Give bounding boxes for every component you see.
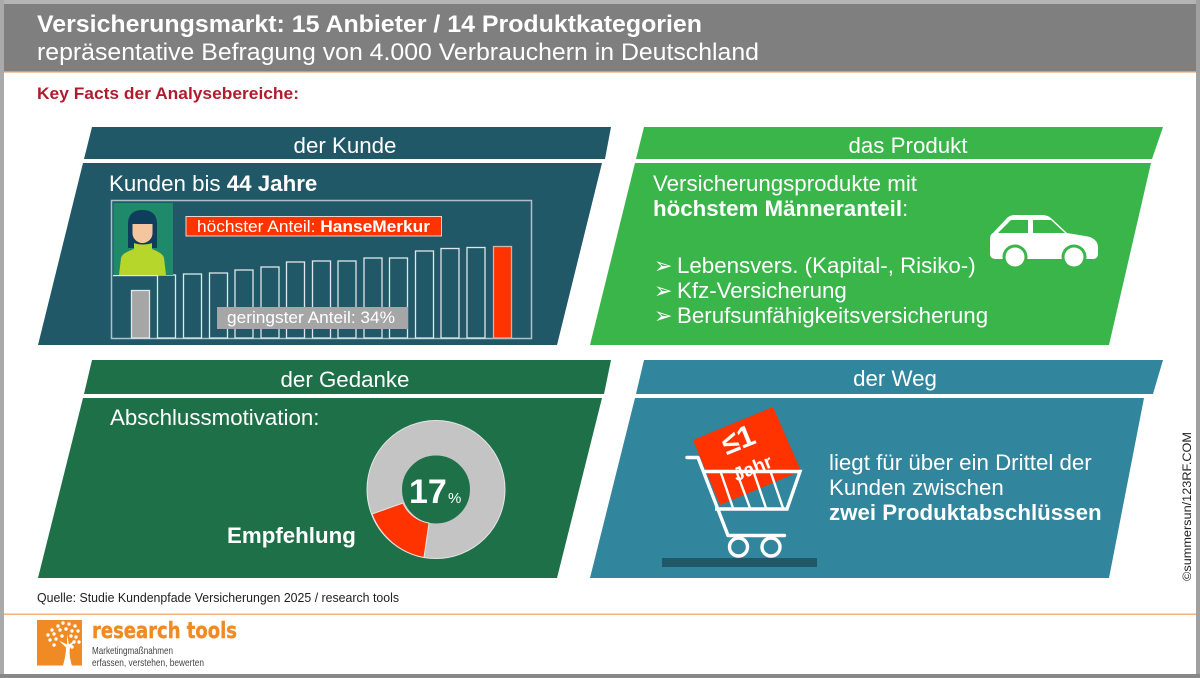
- product list: [654, 253, 988, 328]
- panel: der Kunde: [38, 127, 611, 345]
- donut chart: 17% Empfehlung: [367, 420, 505, 558]
- icon: car: [990, 215, 1098, 270]
- panel lead text: Kunden bis 44 Jahre: [109, 171, 317, 196]
- subtitle: repräsentative Befragung von 4.000 Verbrauchern in Deutschland: [37, 39, 759, 66]
- panel: der Gedanke: [38, 360, 611, 578]
- title: Versicherungsmarkt: 15 Anbieter / 14 Produktkategorien: [37, 11, 702, 38]
- logo wordmark: research tools: [92, 619, 237, 644]
- product list: ➢: [654, 303, 672, 328]
- product list: Kfz-Versicherung: [677, 278, 847, 303]
- callout: highest share: höchster Anteil: HanseMerkur: [197, 217, 430, 236]
- panel heading: der Gedanke: der Gedanke: [281, 367, 409, 392]
- icon: shopping cart with red tag: Jahr: [730, 451, 776, 486]
- panel: das Produkt: höchstem Männeranteil:: [653, 196, 908, 221]
- panel lead text: Abschlussmotivation:: [110, 405, 319, 430]
- panel text: liegt für über ein Drittel der: [829, 450, 1092, 475]
- logo tagline second line: erfassen, verstehen, bewerten: [92, 657, 204, 669]
- panel: der Weg: [590, 360, 1163, 578]
- product list: ➢: [654, 278, 672, 303]
- panel heading: das Produkt: das Produkt: [848, 133, 968, 158]
- icon: shopping cart with red tag: ≤1: [717, 419, 760, 462]
- section heading: Key Facts der Analysebereiche:: [37, 85, 299, 103]
- icon: shopping cart with red tag: [662, 407, 817, 567]
- bar chart: customers up to 44 by provider: [112, 200, 532, 338]
- image credit: ©summersun/123RF.COM: [1182, 432, 1194, 581]
- panel: das Produkt: [590, 127, 1163, 345]
- logo: research tools: [37, 619, 237, 666]
- donut chart: 17% Empfehlung: %: [448, 490, 461, 507]
- product list: Lebensvers. (Kapital-, Risiko-): [677, 253, 976, 278]
- donut label: Empfehlung: [227, 523, 356, 548]
- logo tagline: Marketingmaßnahmen: [92, 645, 173, 657]
- panel: der Weg: zwei Produktabschlüssen: [829, 500, 1102, 525]
- icon: tree: [37, 620, 82, 666]
- source note: Quelle: Studie Kundenpfade Versicherungen 2025 / research tools: [37, 591, 399, 605]
- donut chart: 17% Empfehlung: 17: [409, 473, 447, 511]
- panel heading: der Kunde: der Kunde: [294, 133, 396, 158]
- callout: lowest share: geringster Anteil: 34%: [227, 308, 395, 327]
- panel lead text: Versicherungsprodukte mit: [653, 171, 918, 196]
- icon: woman portrait: [114, 203, 173, 275]
- panel: der Weg: Kunden zwischen: [829, 475, 1004, 500]
- product list: Berufsunfähigkeitsversicherung: [677, 303, 988, 328]
- panel heading: der Weg: der Weg: [853, 366, 937, 391]
- header band: [4, 4, 1196, 72]
- product list: ➢: [654, 253, 672, 278]
